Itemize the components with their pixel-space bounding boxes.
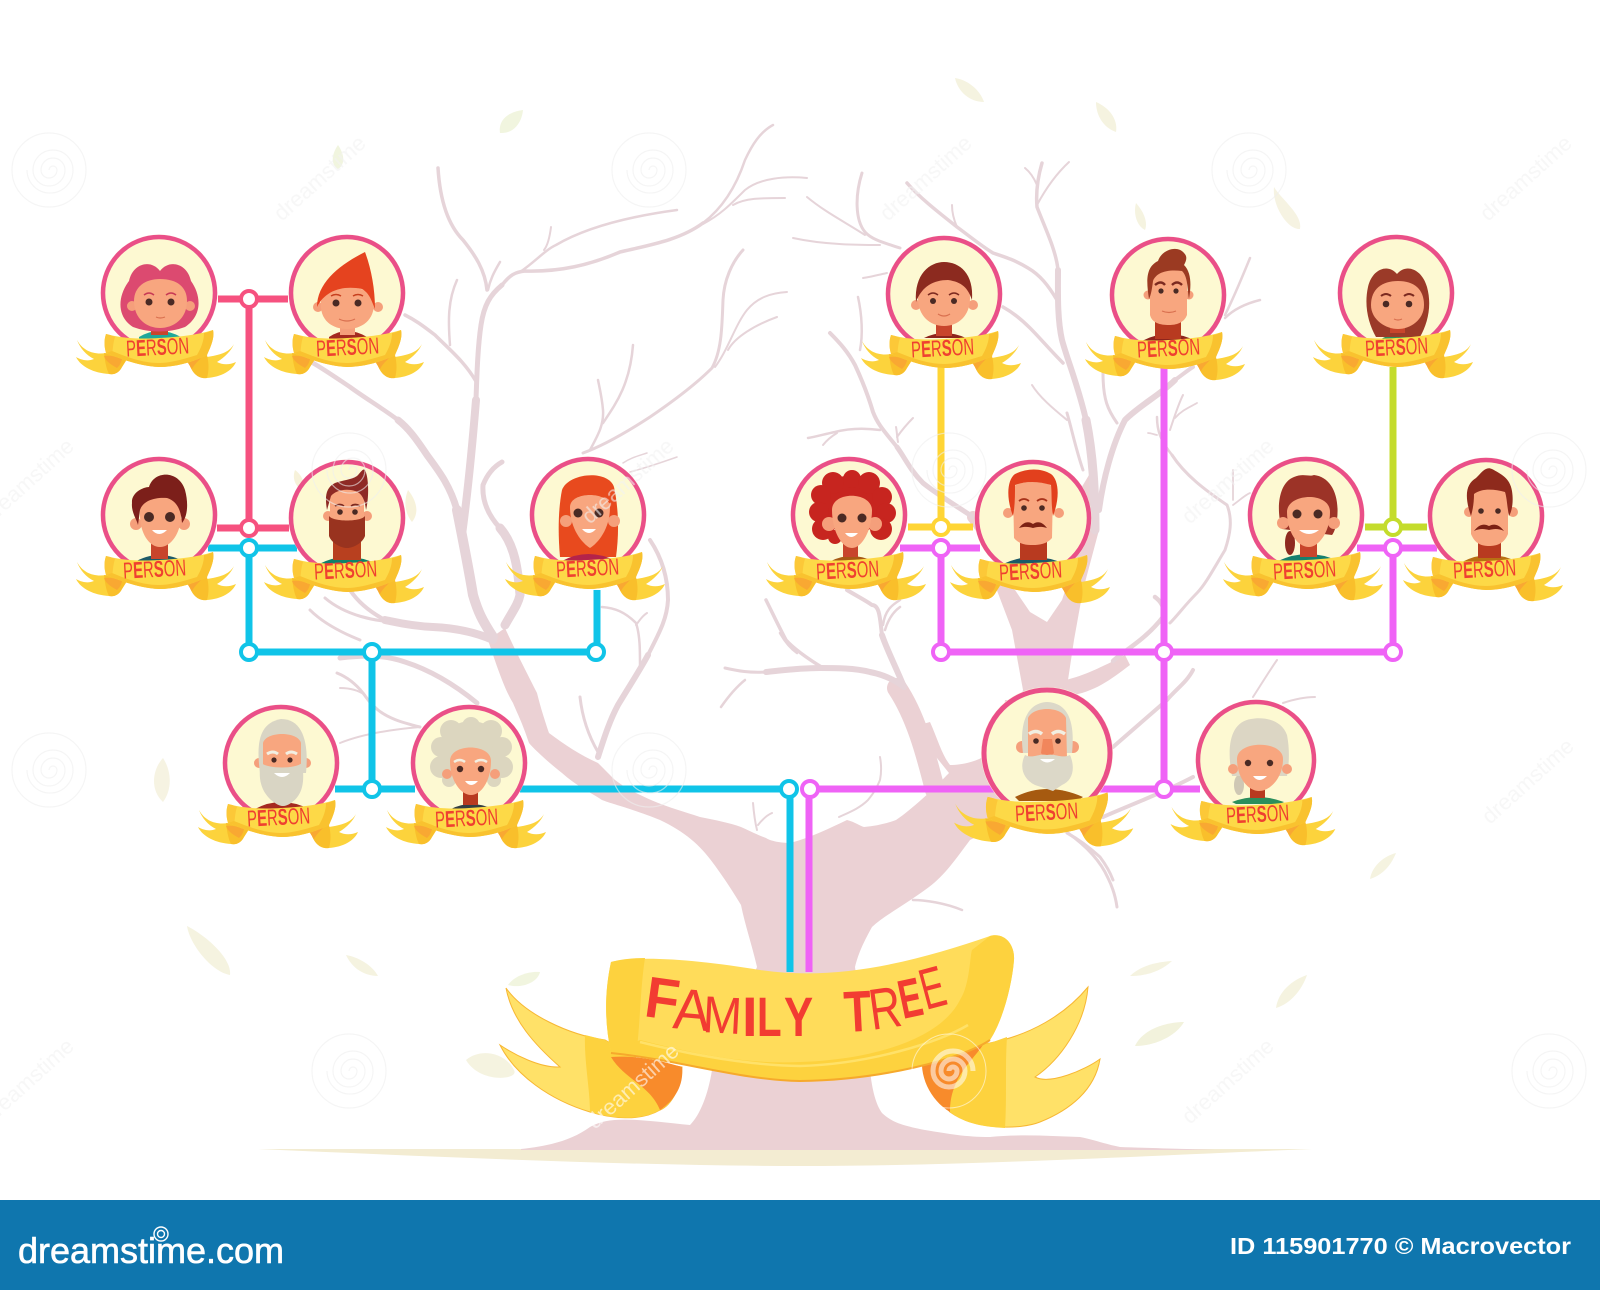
- footer logo spiral: [154, 1227, 168, 1241]
- magenta connector: maternal line: [802, 367, 1437, 972]
- title text: A: [671, 976, 713, 1043]
- person 4: bearded man: PERSON: [313, 555, 378, 585]
- left ribbon tail: [500, 988, 682, 1118]
- watermark text: dreamstime: [269, 130, 371, 226]
- person 9: curly red hair woman: PERSON: [815, 555, 880, 585]
- person 1: pink-haired woman: [76, 234, 236, 378]
- ribbon centre band: [606, 935, 1014, 1081]
- person 15: large grandfather: [954, 687, 1133, 846]
- left branches: [457, 510, 493, 637]
- yellow connector: [908, 367, 973, 535]
- watermark spirals: [12, 133, 1586, 1108]
- tree trunk and main limbs: [488, 628, 1215, 1150]
- person 8: brown hair woman: PERSON: [1364, 332, 1429, 362]
- person 13: grandfather with white beard: PERSON: [246, 802, 311, 832]
- low branch joining right limb: [1066, 655, 1130, 696]
- right branches: [1086, 420, 1095, 530]
- person 4: bearded man: [264, 460, 424, 603]
- footer credit text: ID 115901770 © Macrovector: [1230, 1233, 1571, 1259]
- title text: E: [893, 966, 928, 1031]
- person 16: grandmother with grey hair bun: PERSON: [1225, 799, 1290, 829]
- title text: [641, 954, 953, 1049]
- watermark text: dreamstime: [1177, 433, 1279, 529]
- person 6: short brown hair boy: [861, 236, 1021, 379]
- person 10: red hair man with moustache: [950, 460, 1110, 603]
- person 7: man with hair bun: [1085, 236, 1245, 380]
- person 9: curly red hair woman: [766, 456, 926, 600]
- family connector lines: [208, 291, 1437, 972]
- green connector: [1365, 367, 1427, 535]
- title text: I: [742, 985, 758, 1048]
- person 7: man with hair bun: PERSON: [1136, 333, 1201, 363]
- person 8: brown hair woman: [1313, 234, 1473, 378]
- person 13: grandfather with white beard: [198, 704, 358, 848]
- person 12: dark hair man with moustache: PERSON: [1452, 554, 1517, 584]
- person 12: dark hair man with moustache: [1403, 458, 1563, 601]
- person 3: smiling boy: [76, 456, 236, 600]
- watermark text: dreamstime: [875, 130, 977, 226]
- title text: M: [701, 986, 743, 1046]
- watermark text: [0, 130, 1579, 1134]
- watermark text: dreamstime: [1177, 1033, 1279, 1129]
- person 5: long red hair woman: PERSON: [555, 553, 620, 583]
- main title ribbon: [500, 935, 1100, 1128]
- person 14: grandmother with curly white hair: [386, 704, 546, 848]
- watermark spiral over ribbon: [912, 1034, 986, 1108]
- footer logo text: dreamstime.com: [18, 1230, 284, 1271]
- falling leaves: [154, 78, 1396, 1078]
- tree: [258, 125, 1315, 1166]
- title text: L: [757, 987, 782, 1049]
- watermark text: dreamstime: [1475, 130, 1577, 226]
- upper right trunk fork: [993, 470, 1099, 790]
- title text: R: [865, 973, 905, 1042]
- person 3: smiling boy: PERSON: [122, 554, 187, 584]
- title text: F: [641, 964, 684, 1033]
- ground shadow: [258, 1149, 1312, 1166]
- title text: T: [842, 978, 873, 1044]
- person 10: red hair man with moustache: PERSON: [998, 556, 1063, 586]
- title text: E: [913, 954, 953, 1023]
- person 11: ponytail woman: PERSON: [1272, 555, 1337, 585]
- person 11: ponytail woman: [1223, 456, 1383, 600]
- watermark text: dreamstime: [577, 433, 679, 529]
- person 6: short brown hair boy: PERSON: [910, 333, 975, 363]
- person 2: red pointed hair boy: PERSON: [315, 332, 380, 362]
- watermark text: dreamstime: [582, 1038, 684, 1134]
- person 1: pink-haired woman: PERSON: [125, 332, 190, 362]
- person 5: long red hair woman: [505, 456, 665, 600]
- right ribbon tail: [925, 987, 1100, 1127]
- person 15: large grandfather: PERSON: [1014, 797, 1079, 827]
- person 2: red pointed hair boy: [264, 234, 424, 378]
- pink connector: paternal grandparents' parents: [217, 291, 289, 536]
- person 16: grandmother with grey hair bun: [1171, 700, 1335, 845]
- footer bar: [0, 1200, 1600, 1290]
- cyan connector: paternal line: [208, 540, 797, 972]
- watermark text: dreamstime: [1477, 733, 1579, 829]
- person 14: grandmother with curly white hair: PERSON: [434, 803, 499, 833]
- title text: Y: [784, 986, 813, 1048]
